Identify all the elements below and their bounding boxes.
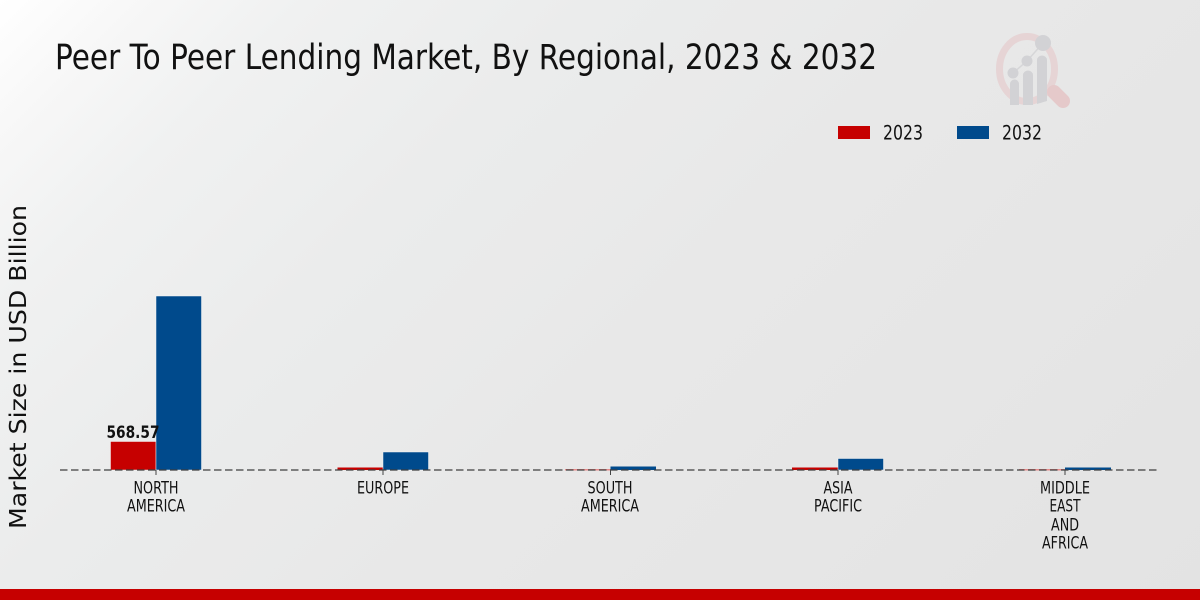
icon: magnifier logo watermark (1000, 35, 1063, 105)
bar chart (60, 296, 1160, 475)
legend item: 2032 (957, 122, 1042, 144)
bars: North America (110, 296, 202, 470)
bars: South America (565, 466, 656, 470)
x-axis label: South America (581, 478, 640, 516)
x-axis label: Asia Pacific: ASIA (824, 478, 853, 498)
legend (838, 122, 1042, 144)
x-axis label: Middle East and Africa: AFRICA (1042, 534, 1089, 552)
data label: 568.57: 568.57 (106, 423, 160, 442)
x-axis label: North America: NORTH (134, 478, 178, 498)
x-axis label: Middle East and Africa: AND (1051, 516, 1079, 534)
x-axis label: North America (127, 478, 186, 516)
x-axis label: South America: SOUTH (588, 478, 632, 498)
x-axis label: Middle East and Africa (1040, 478, 1090, 552)
bars: Europe (338, 452, 428, 470)
legend item: 2023: 2023 (883, 122, 923, 144)
x-axis label: South America: AMERICA (581, 496, 640, 516)
x-axis label: Europe: EUROPE (357, 478, 409, 498)
bars: Middle East and Africa (1019, 468, 1111, 470)
bars: Asia Pacific (792, 458, 884, 470)
x-axis label: Middle East and Africa: MIDDLE (1040, 478, 1090, 498)
legend item: 2032: 2032 (1002, 122, 1042, 144)
footer bar (0, 589, 1200, 600)
baseline (60, 469, 1160, 471)
x-axis label: Asia Pacific (814, 478, 862, 516)
x-axis label: Middle East and Africa: EAST (1050, 496, 1081, 516)
x-axis label: North America: AMERICA (127, 496, 186, 516)
title: Peer To Peer Lending Market, By Regional, 2023 & 2032 (55, 38, 877, 78)
y-axis label: Market Size in USD Billion (4, 205, 32, 529)
x-axis label: Asia Pacific: PACIFIC (814, 496, 862, 516)
legend item: 2023 (838, 122, 923, 144)
